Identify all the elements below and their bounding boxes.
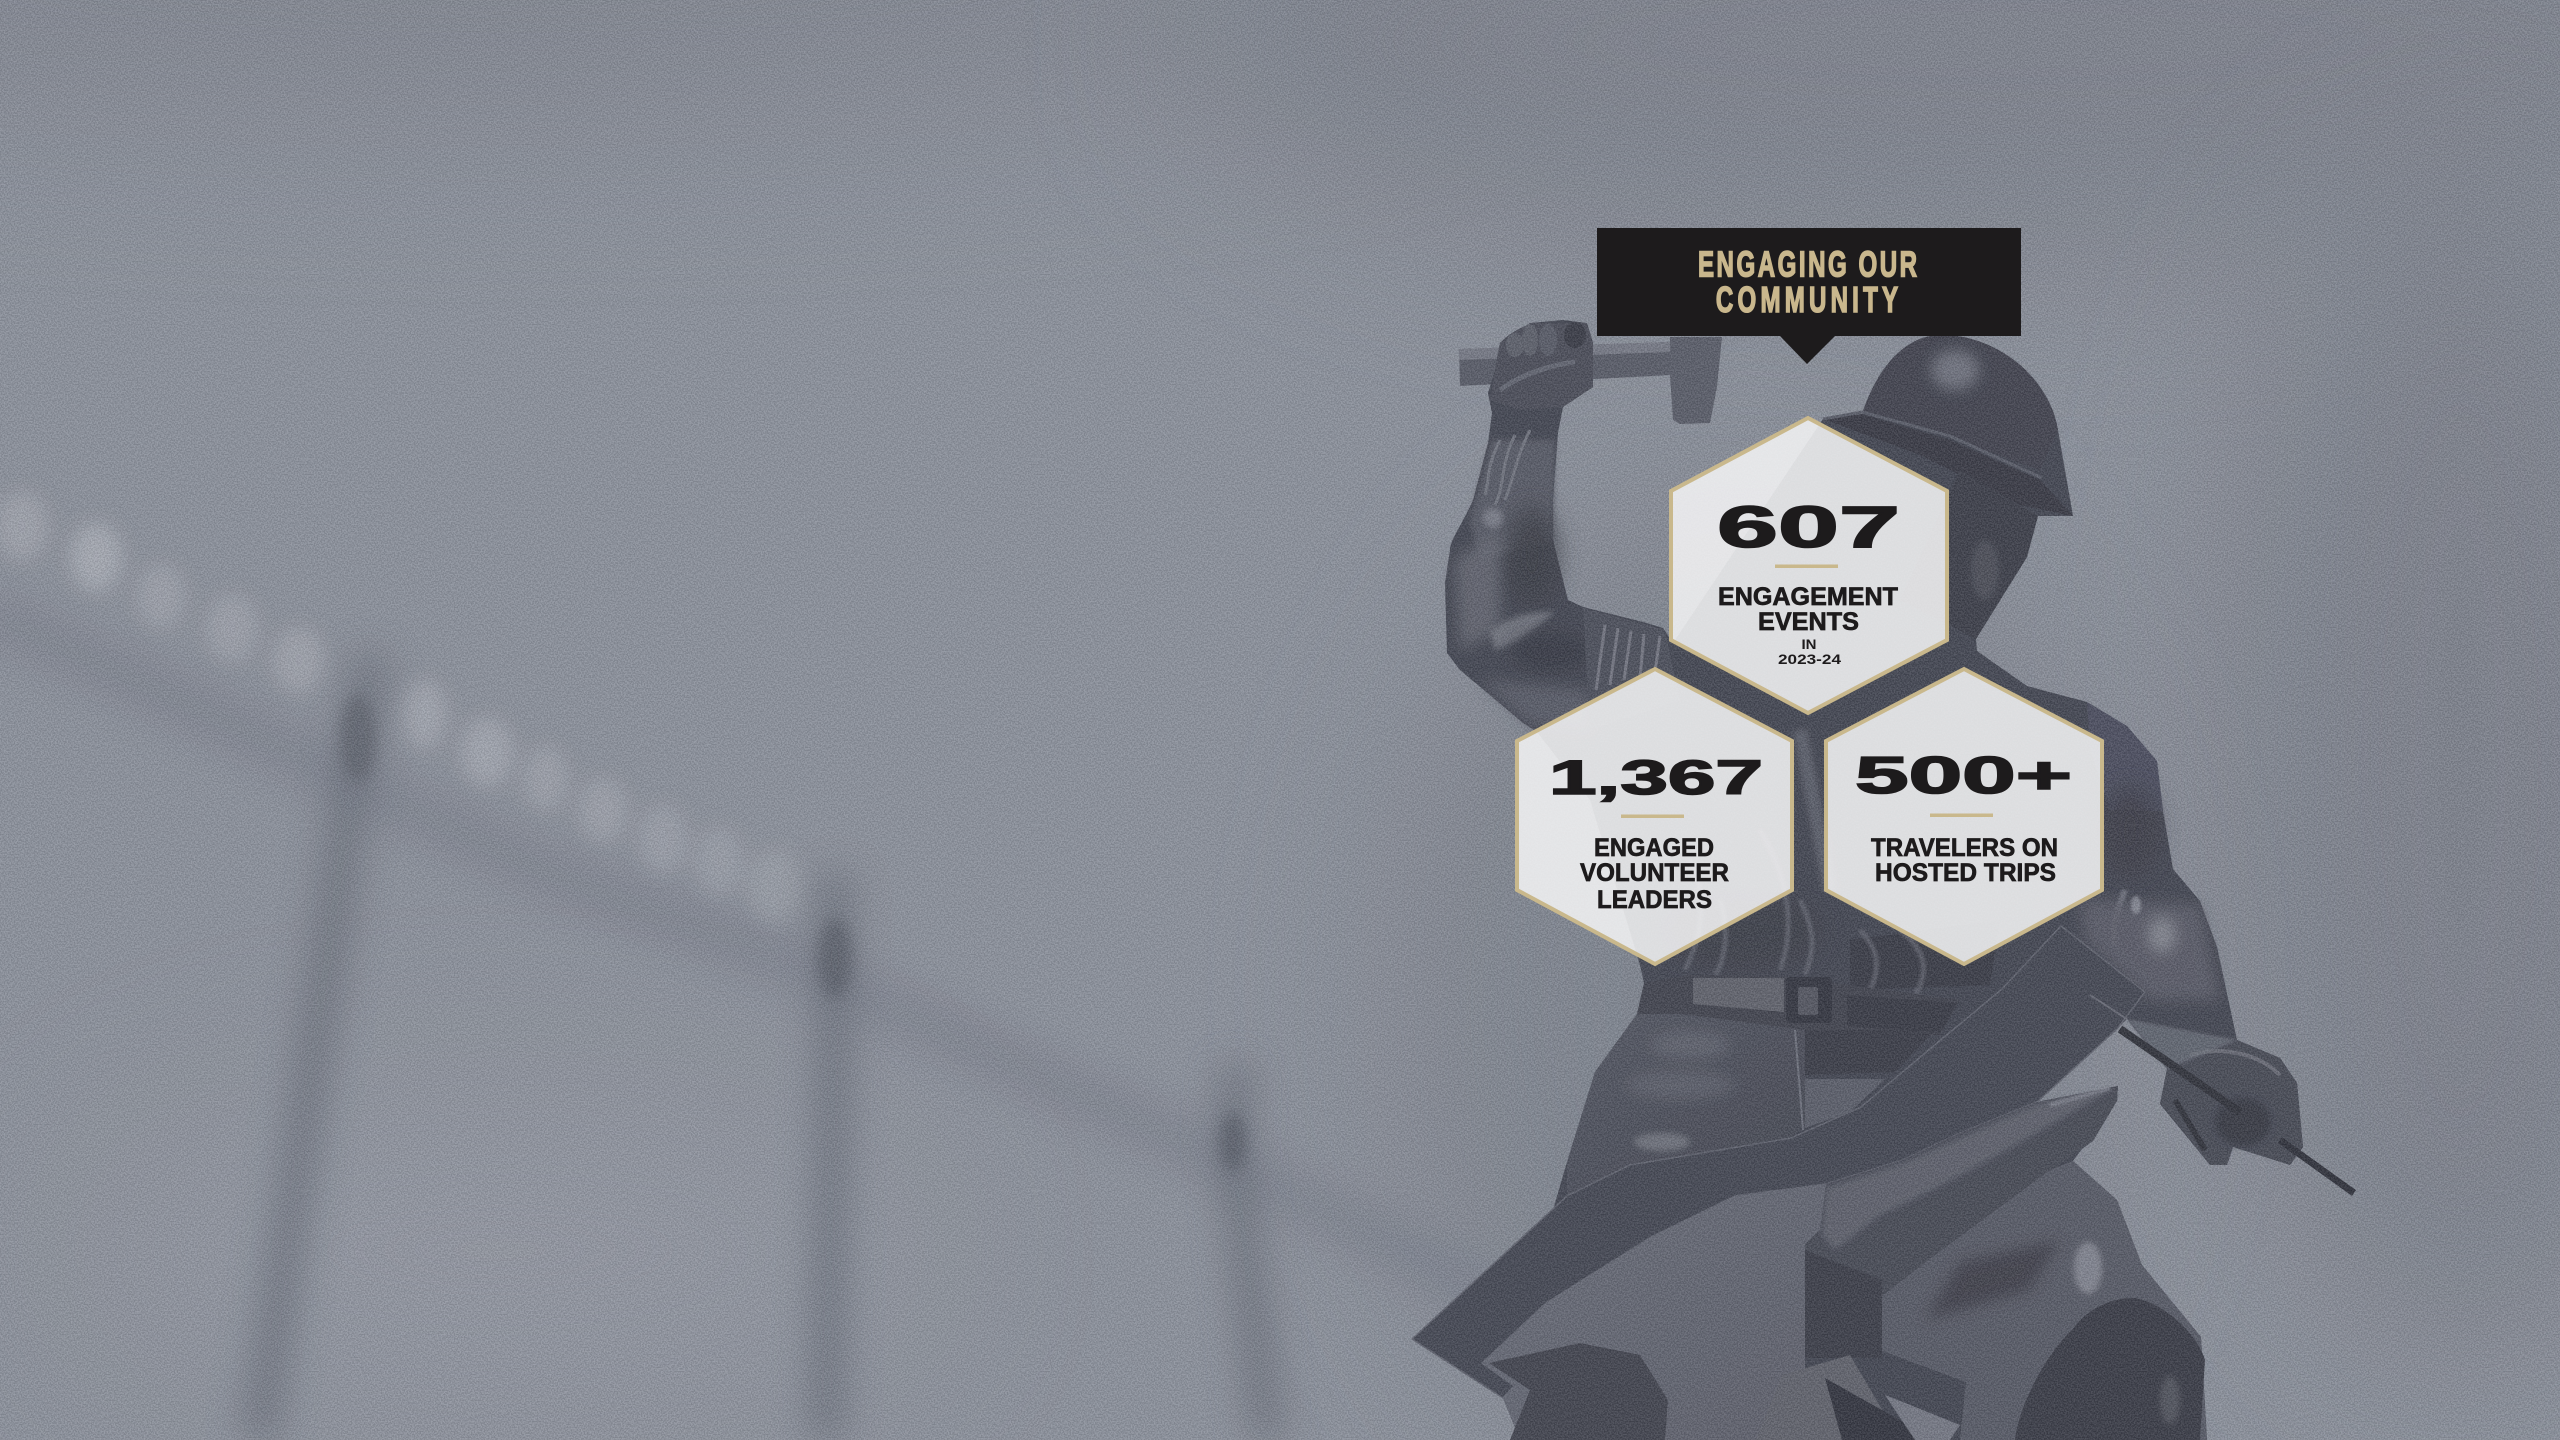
hexagon: 1,367 engaged volunteer leaders <box>1517 669 1792 964</box>
label: travelers on hosted trips: TRAVELERS ON <box>1871 834 2058 862</box>
blurred pole: second <box>818 874 852 1440</box>
statue: anvil body <box>1482 1184 1826 1440</box>
statue: fist <box>1490 322 1593 410</box>
label: engaged volunteer leaders: ENGAGED <box>1594 834 1714 862</box>
statue: dark leg cutout <box>1489 1343 1668 1440</box>
statue: apron band <box>1412 926 2145 1398</box>
label: engaged volunteer leaders: VOLUNTEER <box>1580 859 1729 887</box>
label: engagement events in 2023-24: IN <box>1802 637 1816 652</box>
stat: 607: 607 <box>1717 495 1900 560</box>
label: engagement events in 2023-24: 2023-24 <box>1778 652 1842 667</box>
gold rule <box>1621 814 1684 818</box>
gold rule <box>1930 814 1993 817</box>
gold rule <box>1775 564 1838 568</box>
statue: main silhouette <box>1412 320 2303 1440</box>
statue: shirt and shoulder folds <box>1660 702 2220 1000</box>
banner box with pointer <box>1597 228 2021 364</box>
blurred pole: first <box>259 655 376 1440</box>
stat: 500+: 500+ <box>1855 747 2072 805</box>
banner title: COMMUNITY <box>1716 279 1898 320</box>
statue: forearm and upper arm shading <box>1455 430 1680 730</box>
label: engagement events in 2023-24: ENGAGEMENT <box>1718 583 1898 611</box>
stat: 1,367: 1,367 <box>1549 752 1763 805</box>
statue: hammer <box>1459 337 1722 424</box>
statue: working hand <box>2127 1019 2303 1165</box>
statue: horn highlights <box>1805 1087 2118 1358</box>
blurred beam shadow <box>0 610 1500 1300</box>
statue: helmet <box>1823 335 2073 516</box>
label: travelers on hosted trips: HOSTED TRIPS <box>1875 859 2056 887</box>
statue: tool box at base <box>1756 1355 1960 1440</box>
statue: right thigh <box>1882 1161 2207 1440</box>
hexagon: 607 engagement events <box>1671 418 1947 713</box>
label: engagement events in 2023-24: EVENTS <box>1758 608 1859 636</box>
banner title <box>1698 243 1917 320</box>
blurred pole: third <box>1220 1065 1268 1440</box>
banner title: ENGAGING OUR <box>1698 243 1917 285</box>
statue: anvil horn <box>1805 1086 2118 1358</box>
statue: belt <box>1637 975 1960 1035</box>
blurred light bulbs <box>0 492 803 922</box>
label: travelers on hosted trips <box>1871 834 2058 887</box>
hexagon: 500+ travelers on hosted trips <box>1826 669 2102 964</box>
label: engaged volunteer leaders: LEADERS <box>1597 886 1712 914</box>
heading banner <box>1597 228 2021 364</box>
label: engaged volunteer leaders <box>1580 834 1729 914</box>
statue: trousers <box>1567 1014 1935 1196</box>
statue: chisel <box>2090 995 2354 1193</box>
label: engagement events in 2023-24 <box>1718 583 1898 667</box>
statue: face shadow <box>1900 470 2038 639</box>
statue: hammering worker at anvil <box>1412 320 2354 1440</box>
